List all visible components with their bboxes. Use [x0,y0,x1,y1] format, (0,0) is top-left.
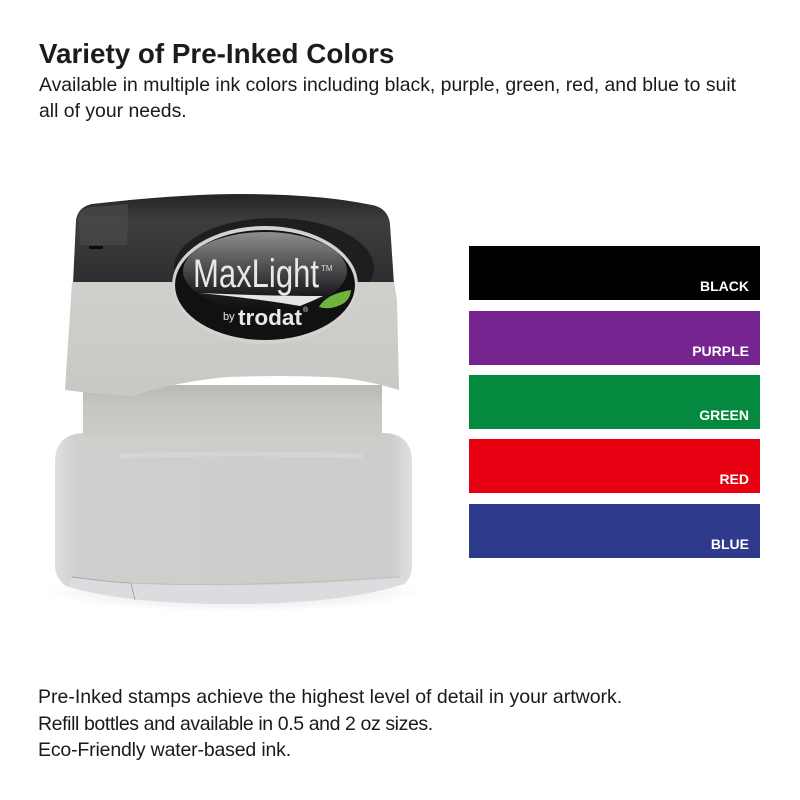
cap side window [78,204,128,245]
swatch: black: BLACK [700,278,749,294]
footer text: Pre-Inked stamps achieve the highest level of detail in your artwork. [38,686,622,708]
swatch: blue: BLUE [711,536,749,552]
logo oval: TM [321,264,333,273]
swatch: black [469,246,760,300]
white swoosh [200,293,323,306]
swatch: green [469,375,760,429]
footer text [38,686,622,761]
stamp collar [65,282,399,396]
stamp neck [83,385,382,437]
logo oval: ® [303,306,309,314]
ground shadow [44,572,424,612]
swatch: purple [469,311,760,365]
swatch: purple: PURPLE [692,343,749,359]
logo oval [172,226,358,344]
stamp black cap [73,194,394,284]
MaxLight wordmark: MaxLight [193,252,319,296]
logo dark ring [174,218,374,318]
logo oval: trodat [238,305,303,330]
stamp base [55,433,412,604]
swatch: red [469,439,760,493]
title: Variety of Pre-Inked Colors [39,38,394,69]
swatch: red: RED [719,471,749,487]
intro text [39,74,736,122]
intro text: all of your needs. [39,100,187,122]
footer text: Eco-Friendly water-based ink. [38,739,291,761]
logo oval: by [223,311,235,323]
footer text: Refill bottles and available in 0.5 and 2 oz sizes. [38,712,433,734]
logo leaf [319,290,351,308]
swatch: blue [469,504,760,558]
intro text: Available in multiple ink colors including black, purple, green, red, and blue to suit [39,74,736,96]
swatch: green: GREEN [699,407,749,423]
